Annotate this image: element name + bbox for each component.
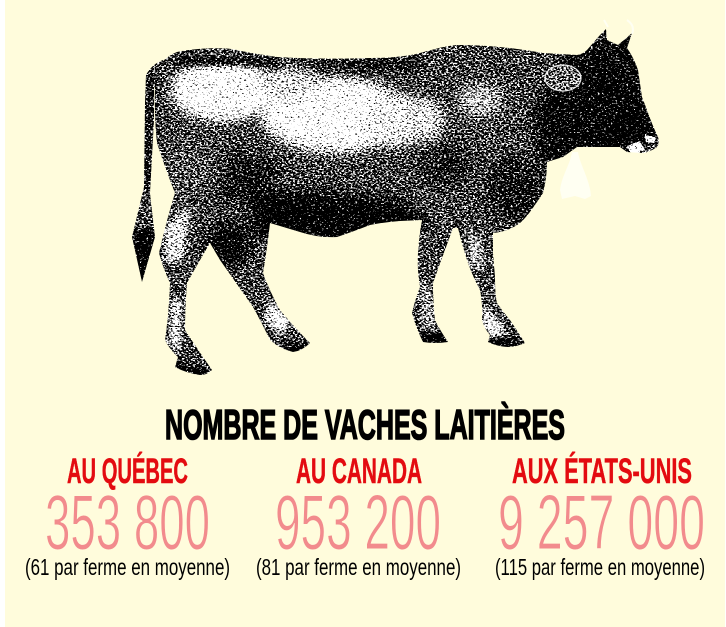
number: 953 200: [275, 478, 441, 566]
note: (61 par ferme en moyenne): [25, 554, 230, 580]
region label: AU CANADA: [296, 452, 422, 491]
column: Canada: [256, 452, 461, 580]
region label: AU QUÉBEC: [67, 451, 188, 491]
icon: engraved dairy cow: [120, 20, 670, 390]
horn highlights: [604, 20, 633, 34]
number: 353 800: [45, 478, 210, 566]
ear: [545, 65, 581, 91]
column: États-Unis: [495, 451, 705, 580]
ear outline: [545, 65, 581, 91]
column: Québec: [25, 451, 230, 580]
muzzle patch: [627, 141, 645, 153]
cow bell: [560, 152, 591, 199]
cow body engraving: [132, 29, 659, 375]
note: (81 par ferme en moyenne): [256, 554, 461, 580]
